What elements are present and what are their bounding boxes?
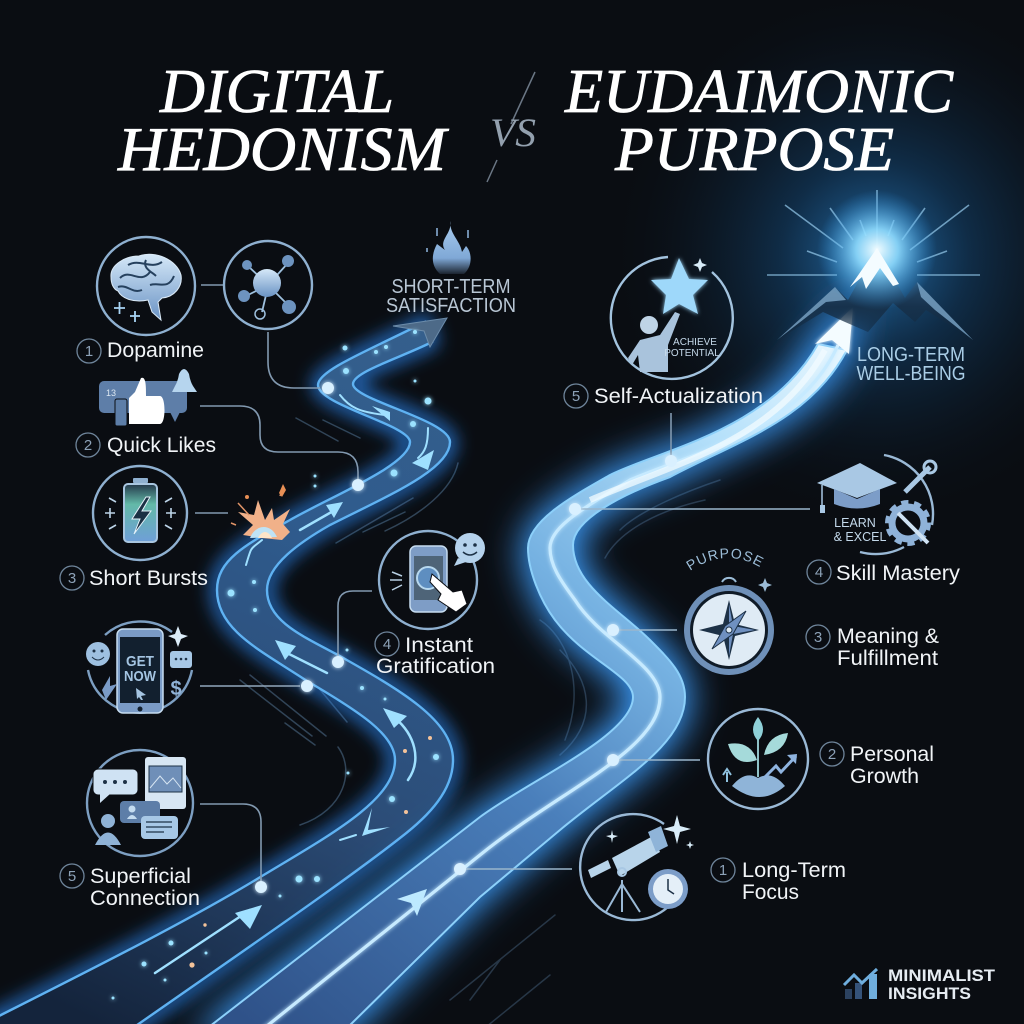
panel: short bursts [60,466,228,590]
icon: phone with get now: $ [170,678,182,700]
label: 2 [828,746,836,763]
road: digital hedonism path [0,318,453,1024]
label: 3 [814,629,822,646]
icon: star and figure: ACHIEVE [673,337,717,348]
background motion streaks [240,415,780,1024]
flow arrows [155,395,434,973]
label: Instant [405,634,473,657]
label: short-term satisfaction: SATISFACTION [386,295,516,317]
label: Meaning & [837,625,939,648]
label: 2 [84,437,92,454]
title: digital hedonism: DIGITAL [159,58,394,126]
icon: telescope and clock [580,814,694,920]
icon: like bubble and bell: 13 [106,388,116,398]
icon: cap and gear [817,455,936,554]
icon: battery [93,466,187,560]
title: eudaimonic purpose: EUDAIMONIC [564,58,954,126]
icon: flame [427,221,471,274]
connector to path [200,804,261,881]
label: Fulfillment [837,647,938,670]
label: 3 [68,570,76,587]
label: short-term satisfaction [386,221,516,317]
title: digital hedonism: HEDONISM [117,116,449,184]
icon: social bubbles [87,750,193,856]
panel: long-term focus [454,814,846,920]
label: Self-Actualization [594,385,763,408]
particles [112,330,439,1000]
connector to path [466,868,572,870]
title: digital hedonism [117,58,449,184]
icon: neuron network [224,241,312,329]
icon: like bubble and bell [99,369,197,426]
panel: personal growth [607,709,934,809]
panel: meaning and fulfillment [604,548,939,675]
icon: phone with get now: GET [126,653,154,670]
label: Short Bursts [89,567,208,590]
icon: sprout [708,709,808,809]
connector to path [200,406,358,485]
icon: star and figure [611,257,733,379]
label: Gratification [376,655,495,678]
label: long-term well-being: WELL-BEING [856,363,966,385]
label: long-term well-being: LONG-TERM [857,344,965,366]
connector [201,284,225,286]
label: Skill Mastery [836,562,961,585]
label: 1 [85,343,93,360]
vs divider: VS [490,110,536,155]
label: 5 [68,868,76,885]
title: eudaimonic purpose: PURPOSE [614,116,894,184]
connector to path [619,759,700,761]
label: 4 [815,564,823,581]
panel: superficial connection [60,750,267,910]
large arrow head [815,307,853,354]
panel: get now phone [86,622,313,713]
icon: chart logo [844,969,877,999]
label: Superficial [90,865,191,888]
icon: compass: PURPOSE [686,548,764,570]
label: Quick Likes [107,434,216,457]
icon: star and figure: POTENTIAL [664,348,720,359]
label: 5 [572,388,580,405]
road centre line [262,345,838,1024]
connector to path [581,508,810,510]
label: Personal [850,743,934,766]
label: Long-Term [742,859,846,882]
connector to path [670,413,672,455]
sun glow and mountain [767,190,980,340]
panel: skill mastery [569,455,961,585]
vs divider [487,72,536,182]
connector to path [200,685,300,687]
burst [231,484,290,540]
icon: compass [684,548,774,675]
icon: phone with get now [86,622,192,713]
road arrow [397,889,427,916]
panel: quick likes [76,369,364,491]
connector [195,512,228,514]
label: long-term well-being [856,344,966,385]
label: Connection [90,887,200,910]
label: Focus [742,881,799,904]
road: eudaimonic path [205,307,853,1024]
title: eudaimonic purpose [564,58,954,184]
icon: phone with get now: NOW [124,668,157,685]
connector to path [268,332,320,388]
connector to path [338,591,372,662]
label: short-term satisfaction: SHORT-TERM [392,276,510,298]
panel: dopamine [77,237,334,394]
icon: cap and gear: & EXCEL [834,530,886,544]
label: 1 [719,862,727,879]
logo: minimalist insights: INSIGHTS [888,984,971,1003]
label: 4 [383,636,391,653]
label: Growth [850,765,919,788]
label [375,632,495,678]
panel: instant gratification [332,531,495,678]
connector to path [619,629,677,631]
panel: self-actualization [564,257,763,467]
icon: cap and gear: LEARN [834,516,876,530]
icon: phone tap [379,531,485,629]
label: Dopamine [107,339,204,362]
label [711,858,846,904]
label [806,625,939,670]
logo: minimalist insights [844,966,996,1003]
road arrow head short-term [393,318,447,347]
label [60,864,200,910]
icon: brain [97,237,195,335]
label [820,742,934,788]
logo: minimalist insights: MINIMALIST [888,966,996,985]
